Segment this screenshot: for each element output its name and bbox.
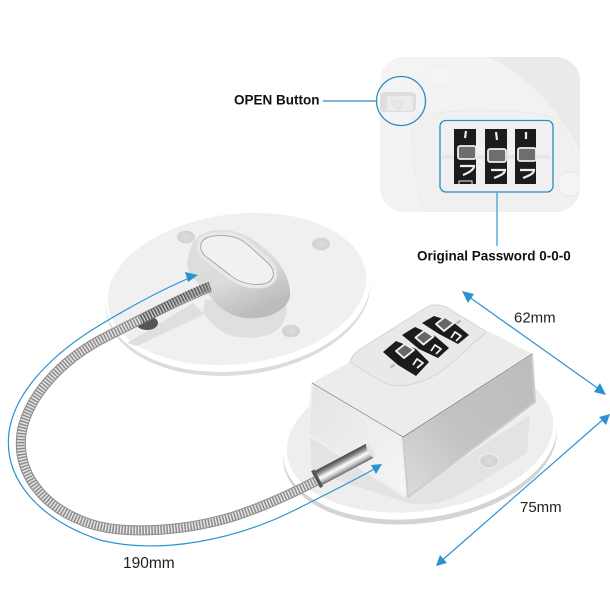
panel: steel cable — [21, 286, 318, 530]
callout: password frame and leader — [440, 120, 553, 246]
arrow: cable length — [8, 272, 382, 546]
panel: lock body — [308, 305, 535, 497]
label: open button: OPEN Button — [234, 92, 320, 108]
label: width: 62mm — [514, 310, 556, 326]
arrow: diameter dimension — [436, 414, 610, 566]
icon: cable ferrule — [311, 441, 377, 488]
panel: cap on upper disc — [187, 230, 290, 318]
left face — [308, 383, 408, 497]
keypad shoulder — [350, 305, 487, 386]
shadow under cable and cap — [127, 290, 287, 346]
label: diameter: 75mm — [520, 499, 562, 516]
icon: inset combination wheels — [442, 129, 550, 185]
label: original password: Original Password 0-0-0 — [417, 248, 571, 264]
icon: screw holes — [136, 230, 331, 338]
top face — [312, 332, 532, 437]
right face — [403, 354, 535, 497]
icon: keypad wheels — [383, 316, 469, 376]
callout: open button circle and leader — [323, 76, 426, 126]
arrow: width dimension — [462, 291, 606, 395]
panel: lower mounting disc — [272, 344, 568, 541]
label: cable length: 190mm — [123, 555, 175, 572]
panel: upper mounting disc — [96, 197, 380, 391]
icon: screw hole — [479, 454, 499, 468]
panel: inset close-up of lock — [380, 57, 582, 212]
